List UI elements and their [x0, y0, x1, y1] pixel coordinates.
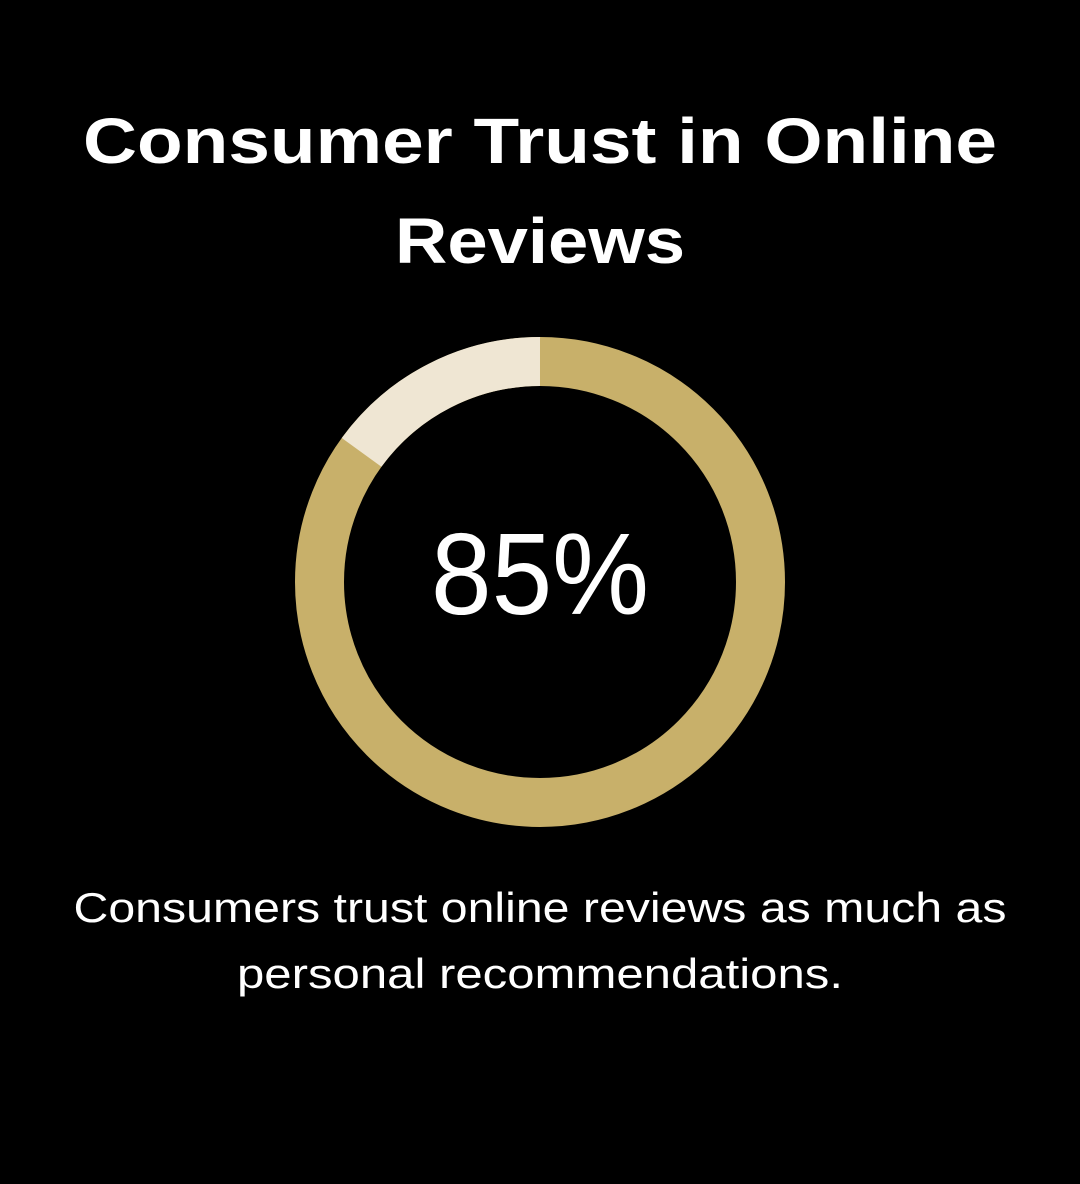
title: Reviews — [395, 205, 685, 277]
description text: personal recommendations. — [237, 950, 843, 997]
donut chart: 85% — [320, 362, 760, 802]
title: Consumer Trust in Online — [83, 105, 997, 177]
description text: Consumers trust online reviews as much as — [74, 884, 1006, 931]
title — [83, 105, 997, 277]
center value: 85% — [431, 509, 649, 639]
description text — [74, 884, 1006, 997]
